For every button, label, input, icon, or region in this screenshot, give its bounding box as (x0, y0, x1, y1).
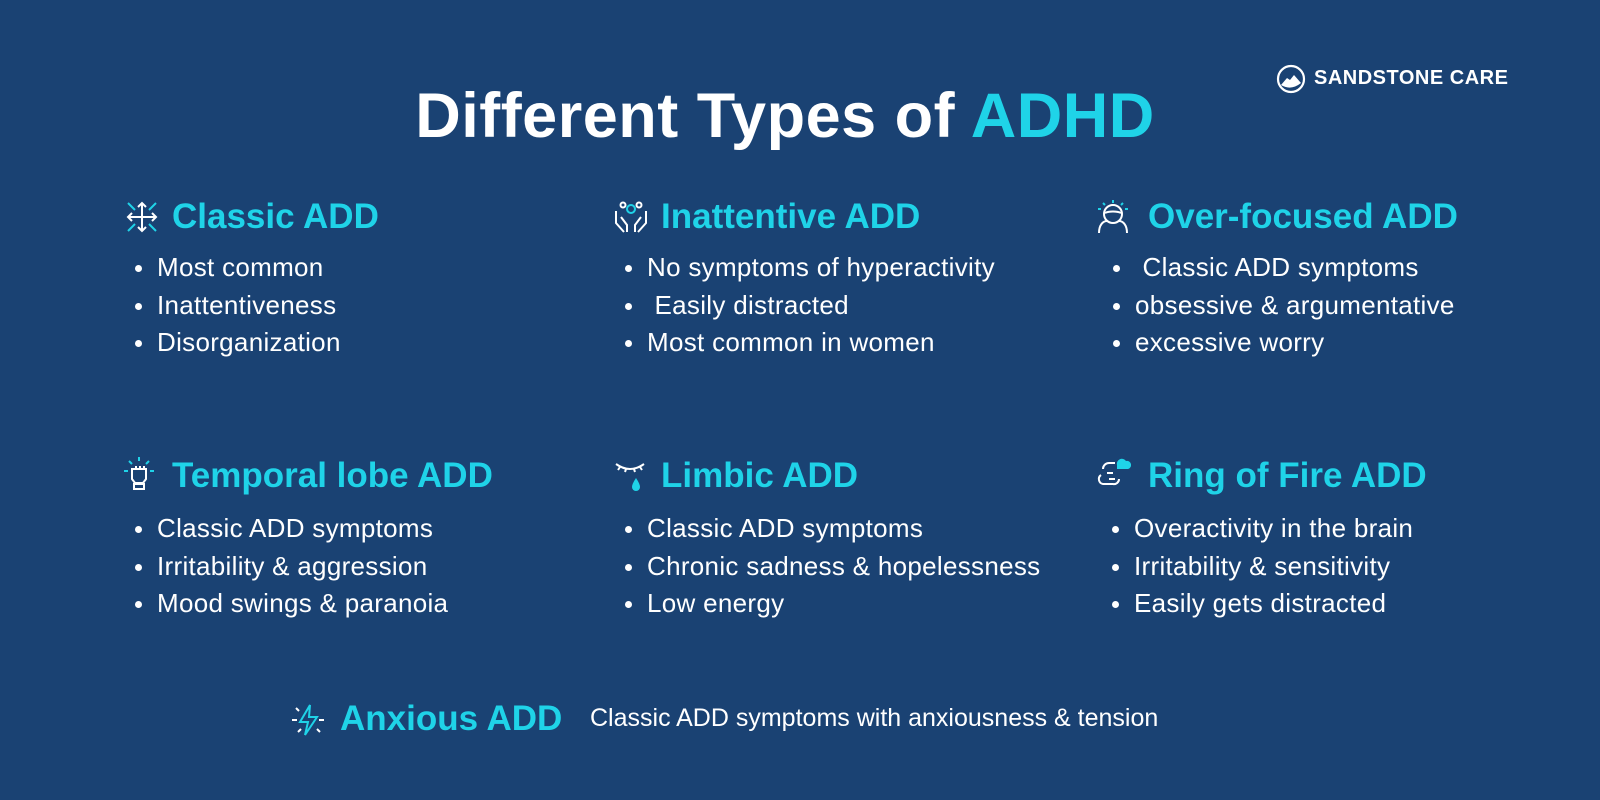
list: over-focused: Classic ADD symptoms (1143, 252, 1419, 282)
list: limbic: Classic ADD symptoms (647, 513, 923, 543)
list: ring of fire: Irritability & sensitivity (1134, 550, 1390, 580)
list: over-focused: excessive worry (1135, 327, 1324, 357)
list: temporal: Classic ADD symptoms (157, 513, 433, 543)
list: limbic: Low energy (647, 588, 784, 618)
list: temporal: Mood swings & paranoia (157, 588, 448, 618)
list: ring of fire: Easily gets distracted (1134, 588, 1386, 618)
list: inattentive: No symptoms of hyperactivity (647, 252, 995, 282)
list: classic: Inattentiveness (157, 290, 336, 320)
heading: Ring of Fire ADD: Ring of Fire ADD (1148, 456, 1427, 495)
list: temporal: Irritability & aggression (157, 550, 428, 580)
heading: Over-focused ADD: Over-focused ADD (1148, 197, 1458, 236)
icon: anxious (292, 704, 324, 736)
icon: limbic (616, 463, 644, 491)
list: inattentive: Easily distracted (655, 290, 849, 320)
logo: SANDSTONE CARE (1314, 67, 1508, 89)
list: ring of fire (1112, 513, 1413, 618)
text: anxious description: Classic ADD symptoms with anxiousness & tension (590, 704, 1158, 732)
heading: Classic ADD: Classic ADD (172, 197, 379, 236)
list: over-focused (1113, 252, 1455, 357)
list: classic (135, 252, 341, 357)
heading: Limbic ADD: Limbic ADD (661, 456, 858, 495)
icon: classic (126, 202, 158, 232)
heading: Temporal lobe ADD: Temporal lobe ADD (172, 456, 493, 495)
title: Different Types of ADHD (415, 81, 1155, 151)
icon: temporal (124, 457, 154, 490)
list: ring of fire: Overactivity in the brain (1134, 513, 1413, 543)
list: classic: Disorganization (157, 327, 341, 357)
list: classic: Most common (157, 252, 324, 282)
icon: inattentive (615, 202, 647, 233)
list: inattentive (625, 252, 995, 357)
list: inattentive: Most common in women (647, 327, 935, 357)
logo (1276, 64, 1508, 94)
list: limbic (625, 513, 1040, 618)
icon: over-focused (1098, 200, 1128, 233)
icon: ring of fire (1098, 458, 1131, 486)
heading: Anxious ADD: Anxious ADD (340, 699, 562, 738)
heading: Inattentive ADD: Inattentive ADD (661, 197, 920, 236)
list: over-focused: obsessive & argumentative (1135, 290, 1455, 320)
list: temporal (135, 513, 448, 618)
list: limbic: Chronic sadness & hopelessness (647, 550, 1040, 580)
